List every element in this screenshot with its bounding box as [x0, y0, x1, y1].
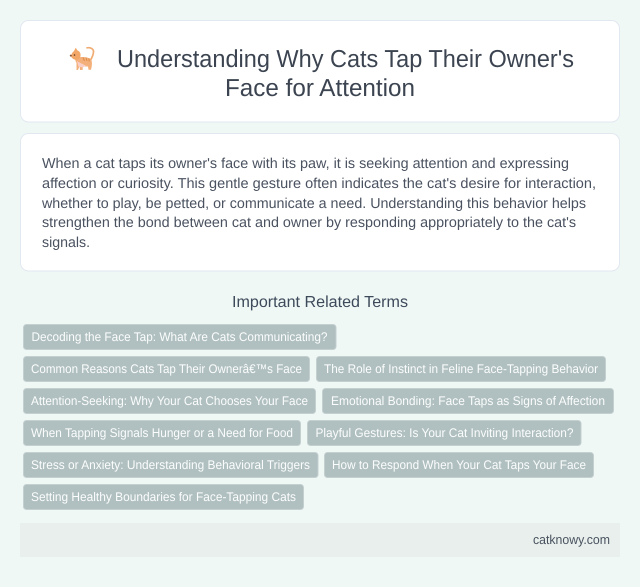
- description text: strengthen the bond between cat and owner by responding appropriately to the cat's: [42, 215, 576, 231]
- tag 5: [322, 388, 614, 414]
- tag 10: [24, 484, 304, 510]
- description text: signals.: [42, 235, 90, 251]
- description text: whether to play, be petted, or communicate a need. Understanding this behavior helps: [41, 196, 586, 212]
- tag 7: [308, 420, 581, 446]
- title: [117, 46, 574, 102]
- icon: cat: [70, 48, 94, 70]
- tag 8: [24, 452, 318, 478]
- related terms tags: [24, 324, 614, 510]
- description text: [41, 156, 596, 251]
- panel: title card: [20, 20, 620, 122]
- tag 7: Playful Gestures: Is Your Cat Inviting Interaction?: [316, 426, 574, 440]
- tag 3: [316, 356, 606, 382]
- tag 6: [24, 420, 300, 446]
- heading: related terms: Important Related Terms: [232, 294, 408, 311]
- tag 9: How to Respond When Your Cat Taps Your Face: [332, 458, 586, 472]
- tag 2: Common Reasons Cats Tap Their Ownerâ€™s Face: [31, 362, 302, 376]
- panel: description: [20, 134, 620, 271]
- tag 1: Decoding the Face Tap: What Are Cats Communicating?: [32, 330, 328, 344]
- title: Understanding Why Cats Tap Their Owner's: [117, 46, 574, 73]
- tag 9: [324, 452, 594, 478]
- tag 6: When Tapping Signals Hunger or a Need for Food: [31, 426, 293, 440]
- tag 1: [24, 324, 336, 350]
- description text: When a cat taps its owner's face with its paw, it is seeking attention and expressing: [42, 156, 569, 172]
- tag 4: Attention-Seeking: Why Your Cat Chooses Your Face: [31, 394, 308, 408]
- tag 3: The Role of Instinct in Feline Face-Tapping Behavior: [324, 362, 598, 376]
- tag 5: Emotional Bonding: Face Taps as Signs of Affection: [331, 394, 605, 408]
- footer source text: catknowy.com: [533, 532, 610, 547]
- tag 8: Stress or Anxiety: Understanding Behavioral Triggers: [31, 458, 310, 472]
- footer: [20, 523, 620, 557]
- tag 4: [24, 388, 316, 414]
- title: Face for Attention: [225, 75, 415, 102]
- description text: affection or curiosity. This gentle gesture often indicates the cat's desire for interaction,: [42, 176, 596, 192]
- tag 10: Setting Healthy Boundaries for Face-Tapping Cats: [31, 490, 296, 504]
- tag 2: [24, 356, 310, 382]
